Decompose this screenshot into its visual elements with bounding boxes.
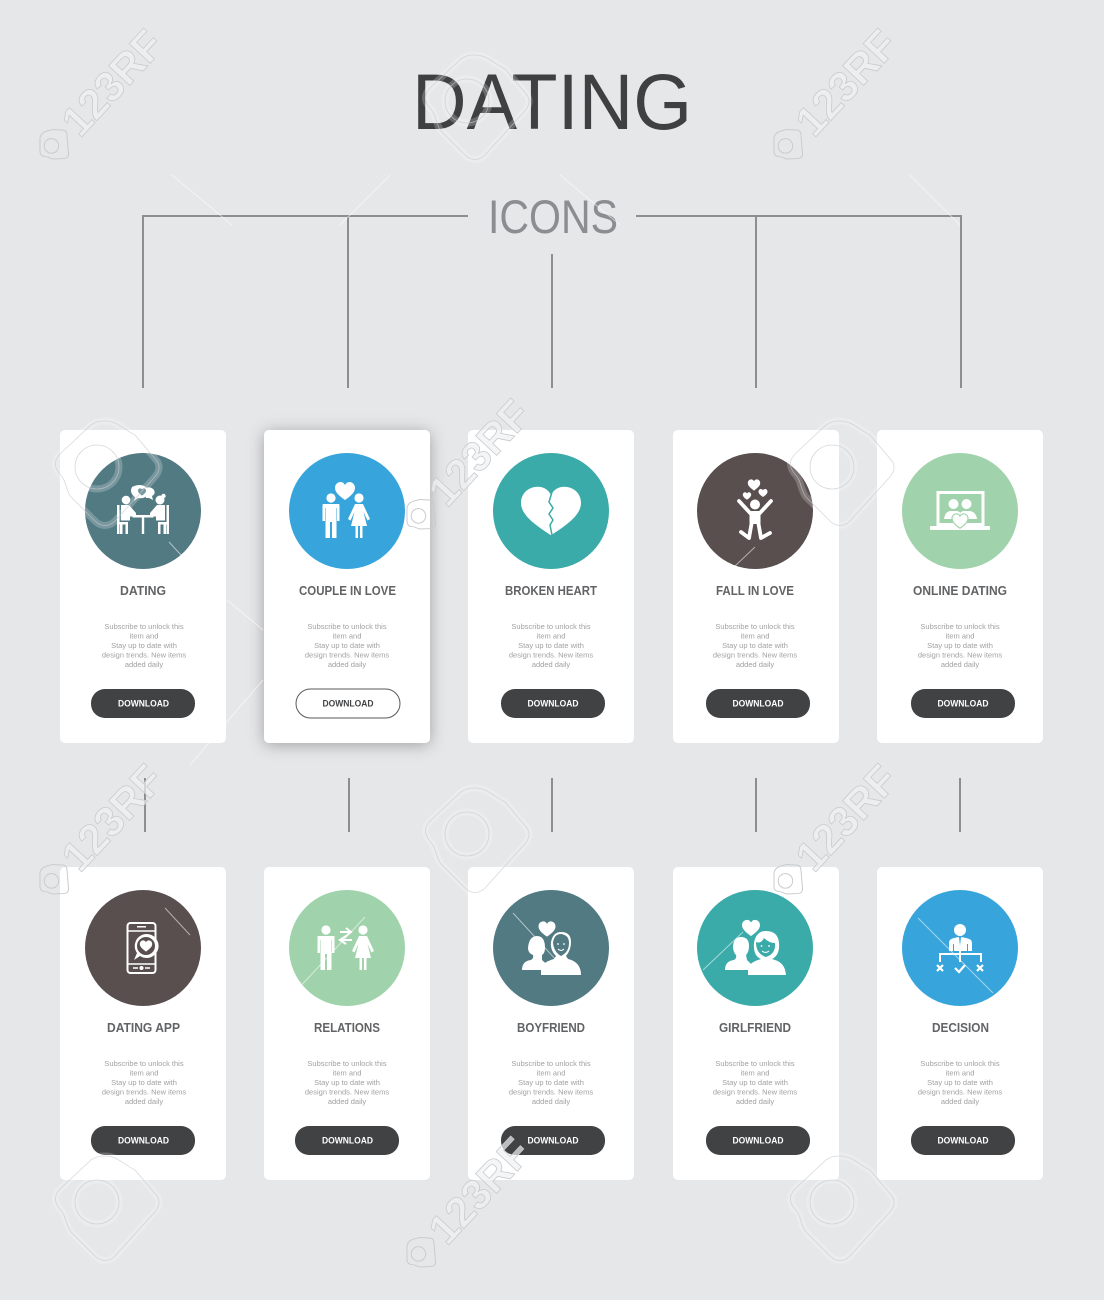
description: added daily xyxy=(736,660,774,669)
download button xyxy=(911,1126,1015,1155)
subtitle: ICONS xyxy=(488,190,618,243)
description: Stay up to date with xyxy=(314,1078,380,1087)
description: design trends. New items xyxy=(102,1088,186,1096)
download button xyxy=(706,689,810,718)
description: added daily xyxy=(941,1097,979,1106)
label: BROKEN HEART xyxy=(505,583,597,598)
connectors: top bracket xyxy=(143,216,961,388)
description: Subscribe to unlock this xyxy=(920,1059,1000,1068)
download button xyxy=(501,1126,605,1155)
card: couple in love xyxy=(264,430,430,743)
description: Stay up to date with xyxy=(927,1078,993,1087)
description: item and xyxy=(333,632,361,640)
icon: man and woman with arrows xyxy=(289,890,405,1006)
description: Subscribe to unlock this xyxy=(511,1059,591,1068)
download button: DOWNLOAD xyxy=(732,698,784,708)
label: BOYFRIEND xyxy=(517,1020,585,1035)
description xyxy=(918,622,1002,669)
label: DATING xyxy=(120,583,166,598)
description xyxy=(918,1059,1002,1106)
description: Stay up to date with xyxy=(722,1078,788,1087)
description: Stay up to date with xyxy=(111,641,177,650)
description: Subscribe to unlock this xyxy=(511,622,591,631)
description: added daily xyxy=(532,1097,570,1106)
description: Subscribe to unlock this xyxy=(307,1059,387,1068)
description: added daily xyxy=(125,1097,163,1106)
download button: DOWNLOAD xyxy=(528,698,579,708)
description: added daily xyxy=(328,660,366,669)
description xyxy=(509,1059,593,1106)
description: Stay up to date with xyxy=(111,1078,177,1087)
download button xyxy=(91,1126,195,1155)
description xyxy=(713,622,797,669)
download button xyxy=(501,689,605,718)
description: Subscribe to unlock this xyxy=(715,1059,795,1068)
download button xyxy=(91,689,195,718)
description: item and xyxy=(537,632,565,640)
description: Stay up to date with xyxy=(314,641,380,650)
description: item and xyxy=(333,1068,361,1078)
description: design trends. New items xyxy=(509,650,593,660)
download button: DOWNLOAD xyxy=(528,1136,579,1146)
description: item and xyxy=(130,632,158,640)
card: decision xyxy=(877,867,1043,1180)
download button: outlined: DOWNLOAD xyxy=(322,698,374,708)
description: design trends. New items xyxy=(509,1088,593,1096)
card: fall in love xyxy=(673,430,839,743)
description: Subscribe to unlock this xyxy=(715,622,795,631)
icon: dating couple at table xyxy=(85,453,201,569)
label: DATING APP xyxy=(107,1020,180,1035)
description: design trends. New items xyxy=(102,650,186,660)
description: added daily xyxy=(941,660,979,669)
description: item and xyxy=(741,1068,769,1078)
description: added daily xyxy=(736,1097,774,1106)
description: item and xyxy=(130,1068,158,1078)
label: RELATIONS xyxy=(314,1020,380,1035)
description xyxy=(102,622,186,669)
download button: DOWNLOAD xyxy=(732,1136,784,1146)
download button: DOWNLOAD xyxy=(938,1136,989,1146)
icon: phone with heart message xyxy=(85,890,201,1006)
card: boyfriend xyxy=(468,867,634,1180)
description: added daily xyxy=(532,660,570,669)
description: added daily xyxy=(328,1097,366,1106)
icon: girlfriend and man portrait xyxy=(697,890,813,1006)
description xyxy=(713,1059,797,1106)
icon: laptop with couple xyxy=(902,453,1018,569)
label: ONLINE DATING xyxy=(913,583,1007,598)
card: dating xyxy=(60,430,226,743)
description: Stay up to date with xyxy=(927,641,993,650)
card: online dating xyxy=(877,430,1043,743)
download button: DOWNLOAD xyxy=(322,1136,373,1146)
description: item and xyxy=(946,632,974,640)
download button xyxy=(911,689,1015,718)
icon: boyfriend and girl portrait xyxy=(493,890,609,1006)
title: DATING xyxy=(412,57,692,146)
download button: DOWNLOAD xyxy=(938,698,989,708)
download button: DOWNLOAD xyxy=(118,698,169,708)
download button: outlined xyxy=(296,689,400,718)
description: design trends. New items xyxy=(918,1088,1002,1096)
download button xyxy=(295,1126,399,1155)
description: design trends. New items xyxy=(918,650,1002,660)
label: COUPLE IN LOVE xyxy=(299,583,396,598)
label: GIRLFRIEND xyxy=(719,1020,791,1035)
description: Stay up to date with xyxy=(518,1078,584,1087)
description: item and xyxy=(946,1068,974,1078)
description xyxy=(509,622,593,669)
label: FALL IN LOVE xyxy=(716,583,794,598)
description xyxy=(102,1059,186,1106)
icon: couple with heart xyxy=(289,453,405,569)
description: design trends. New items xyxy=(713,650,797,660)
description: Subscribe to unlock this xyxy=(104,622,184,631)
card: relations xyxy=(264,867,430,1180)
description: item and xyxy=(741,632,769,640)
description: Stay up to date with xyxy=(722,641,788,650)
card: broken heart xyxy=(468,430,634,743)
download button: DOWNLOAD xyxy=(118,1136,169,1146)
icon: businessman with decision tree xyxy=(902,890,1018,1006)
description: design trends. New items xyxy=(305,650,389,660)
description xyxy=(305,622,389,669)
card: dating app xyxy=(60,867,226,1180)
icon: jumping person with hearts xyxy=(697,453,813,569)
description: added daily xyxy=(125,660,163,669)
icon: broken heart xyxy=(493,453,609,569)
description xyxy=(305,1059,389,1106)
description: item and xyxy=(537,1068,565,1078)
card: girlfriend xyxy=(673,867,839,1180)
description: design trends. New items xyxy=(713,1088,797,1096)
description: Subscribe to unlock this xyxy=(104,1059,184,1068)
description: Stay up to date with xyxy=(518,641,584,650)
connectors: between rows xyxy=(145,778,960,832)
description: Subscribe to unlock this xyxy=(920,622,1000,631)
download button xyxy=(706,1126,810,1155)
label: DECISION xyxy=(932,1020,989,1035)
description: design trends. New items xyxy=(305,1088,389,1096)
description: Subscribe to unlock this xyxy=(307,622,387,631)
